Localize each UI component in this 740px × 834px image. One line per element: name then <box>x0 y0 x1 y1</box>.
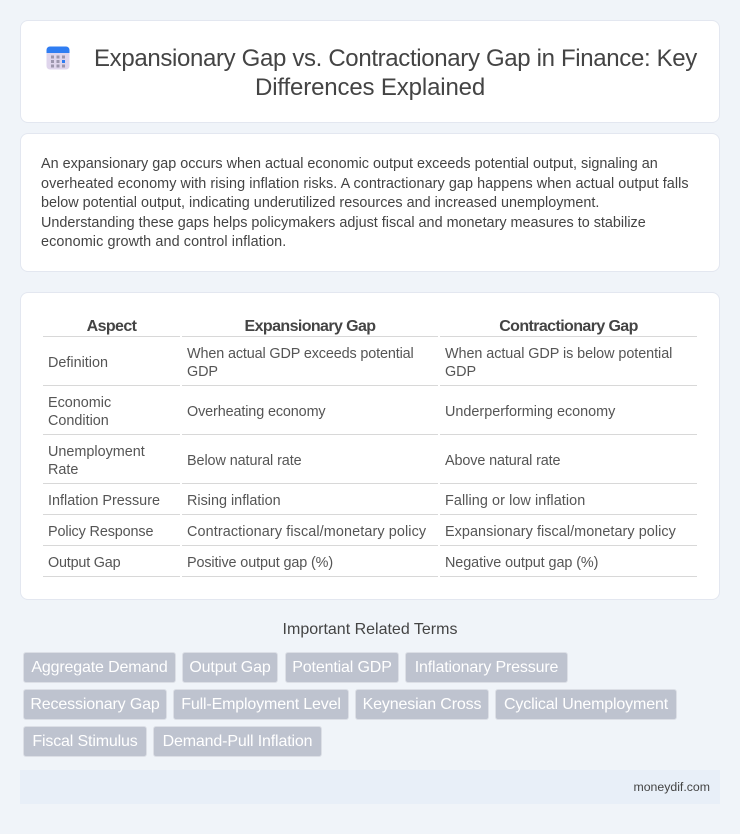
cell: Expansionary policy: Contractionary fiscal/monetary policy <box>187 524 426 540</box>
tag: Cyclical Unemployment <box>504 696 668 713</box>
cell: Expansionary definition <box>187 346 414 380</box>
cell: Contractionary inflation: Falling or low inflation <box>445 493 585 509</box>
text block: introduction <box>41 156 689 250</box>
heading: related terms: Important Related Terms <box>283 621 457 638</box>
cell: Contractionary definition: When actual GDP is below potential <box>445 346 672 362</box>
text block: introduction: below potential output, indicating underutilized resources and increased unemployment. <box>41 195 599 211</box>
table header: Contractionary Gap: Contractionary Gap <box>499 318 638 335</box>
cell: Expansionary inflation: Rising inflation <box>187 493 281 509</box>
icon: calendar <box>46 46 70 70</box>
footer: source: moneydif.com <box>633 780 710 794</box>
cell: Contractionary condition: Underperforming economy <box>445 404 615 420</box>
tag: Aggregate Demand <box>31 659 168 676</box>
tag <box>405 652 568 683</box>
row: Unemployment Rate: Rate <box>48 462 78 478</box>
tag <box>182 652 278 683</box>
title: Expansionary Gap vs. Contractionary Gap in Finance: Key <box>94 45 697 72</box>
row: Policy Response: Policy Response <box>48 524 153 540</box>
tag <box>355 689 489 720</box>
tag: Inflationary Pressure <box>415 659 558 676</box>
text block: introduction: An expansionary gap occurs when actual economic output exceeds potential output, signaling an <box>41 156 658 172</box>
tag <box>23 689 167 720</box>
cell: Expansionary output gap: Positive output gap (%) <box>187 555 333 571</box>
text block: introduction: Understanding these gaps helps policymakers adjust fiscal and monetary measures to stabilize <box>41 214 646 230</box>
tag <box>153 726 322 757</box>
row: Economic Condition <box>48 395 111 429</box>
row: Unemployment Rate <box>48 444 145 478</box>
tag: Potential GDP <box>292 659 392 676</box>
table header: Aspect: Aspect <box>87 318 136 335</box>
row: Output Gap: Output Gap <box>48 555 120 571</box>
cell: Expansionary unemployment: Below natural rate <box>187 453 302 469</box>
row: Economic Condition: Economic <box>48 395 111 411</box>
tag <box>285 652 399 683</box>
text block: introduction: overheated economy with rising inflation risks. A contractionary gap happens when actual output falls <box>41 176 689 192</box>
row: Inflation Pressure: Inflation Pressure <box>48 493 160 509</box>
row: Definition: Definition <box>48 355 108 371</box>
cell: Contractionary unemployment: Above natural rate <box>445 453 560 469</box>
title: Differences Explained <box>255 74 485 101</box>
cell: Contractionary definition <box>445 346 672 380</box>
row: Economic Condition: Condition <box>48 413 109 429</box>
cell: Contractionary policy: Expansionary fiscal/monetary policy <box>445 524 676 540</box>
tag <box>23 652 176 683</box>
row: Unemployment Rate: Unemployment <box>48 444 145 460</box>
panel: title header <box>20 20 720 123</box>
tag: Demand-Pull Inflation <box>163 733 312 750</box>
comparison table <box>43 318 697 577</box>
cell: Expansionary condition: Overheating economy <box>187 404 326 420</box>
tag <box>23 726 147 757</box>
text block: introduction: economic growth and control inflation. <box>41 234 286 250</box>
tag: Output Gap <box>189 659 271 676</box>
tag: Fiscal Stimulus <box>32 733 138 750</box>
related term tags <box>23 652 677 757</box>
cell: Contractionary definition: GDP <box>445 364 476 380</box>
tag: Full-Employment Level <box>181 696 341 713</box>
panel: comparison table <box>20 292 720 600</box>
tag <box>495 689 677 720</box>
table header: Expansionary Gap: Expansionary Gap <box>245 318 375 335</box>
cell: Expansionary definition: When actual GDP exceeds potential <box>187 346 414 362</box>
tag: Keynesian Cross <box>363 696 481 713</box>
tag: Recessionary Gap <box>30 696 160 713</box>
title <box>94 45 698 101</box>
panel: introduction <box>20 133 720 272</box>
footer bar <box>20 770 720 804</box>
tag <box>173 689 349 720</box>
cell: Contractionary output gap: Negative output gap (%) <box>445 555 598 571</box>
cell: Expansionary definition: GDP <box>187 364 218 380</box>
